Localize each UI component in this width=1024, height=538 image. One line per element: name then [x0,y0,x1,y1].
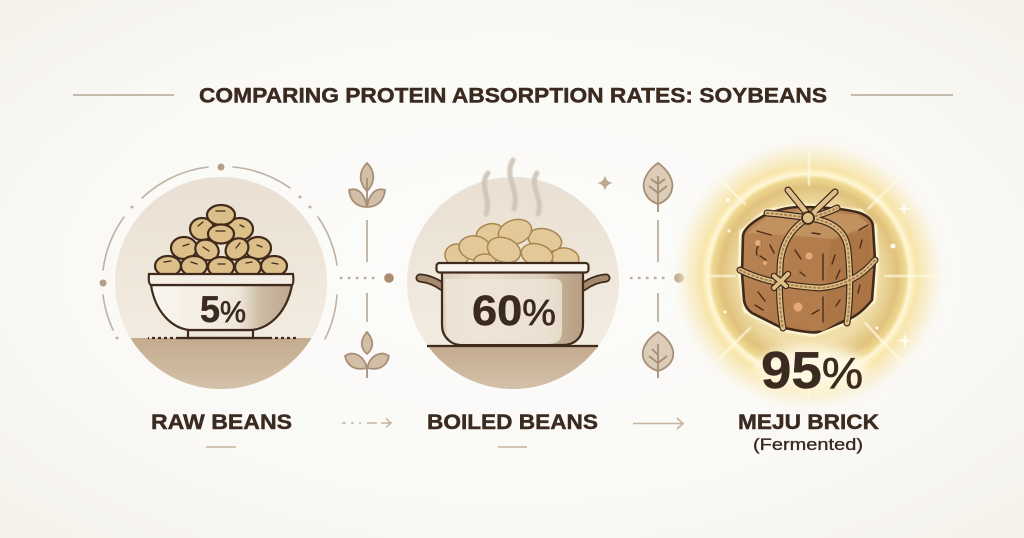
boiled beans [444,218,580,262]
title: COMPARING PROTEIN ABSORPTION RATES: SOYBEANS [199,84,827,108]
icon: sprout bottom [345,332,389,378]
icon: sparkle [597,175,613,191]
golden glow [669,135,949,415]
rope [740,190,875,328]
decorative ring of arcs and dots [100,164,337,340]
sparkles [724,198,912,348]
raw beans label: RAW BEANS [151,410,292,434]
boiled beans label: BOILED BEANS [427,410,598,434]
steam [484,160,539,214]
pot [420,263,606,346]
icon: sprout top [349,163,385,207]
connector: boiled to meju [597,163,684,429]
meju brick [740,190,875,332]
meju percentage: 95% [761,342,863,400]
boiled beans disc [407,177,619,389]
boiled beans percentage: 60% [472,287,556,335]
vertical line and dots [630,220,684,322]
dashed arrow [342,418,391,428]
raw beans percentage: 5% [200,289,246,330]
meju sublabel: (Fermented) [753,435,863,454]
rays [708,150,943,400]
arrow [633,418,683,429]
panel: meju brick [669,135,949,454]
panel: raw beans [100,164,337,447]
icon: leaf top [644,163,672,212]
halo behind brick [742,207,875,333]
connector: raw to boiled [340,163,394,428]
panel: boiled beans [405,160,627,447]
pile of raw soybeans [155,205,287,277]
icon: leaf bottom [643,332,673,378]
glow behind the percentage [756,346,868,390]
meju label: MEJU BRICK [738,410,879,434]
bowl [148,274,296,338]
vertical line and dots [340,220,394,322]
raw beans disc [115,177,327,389]
